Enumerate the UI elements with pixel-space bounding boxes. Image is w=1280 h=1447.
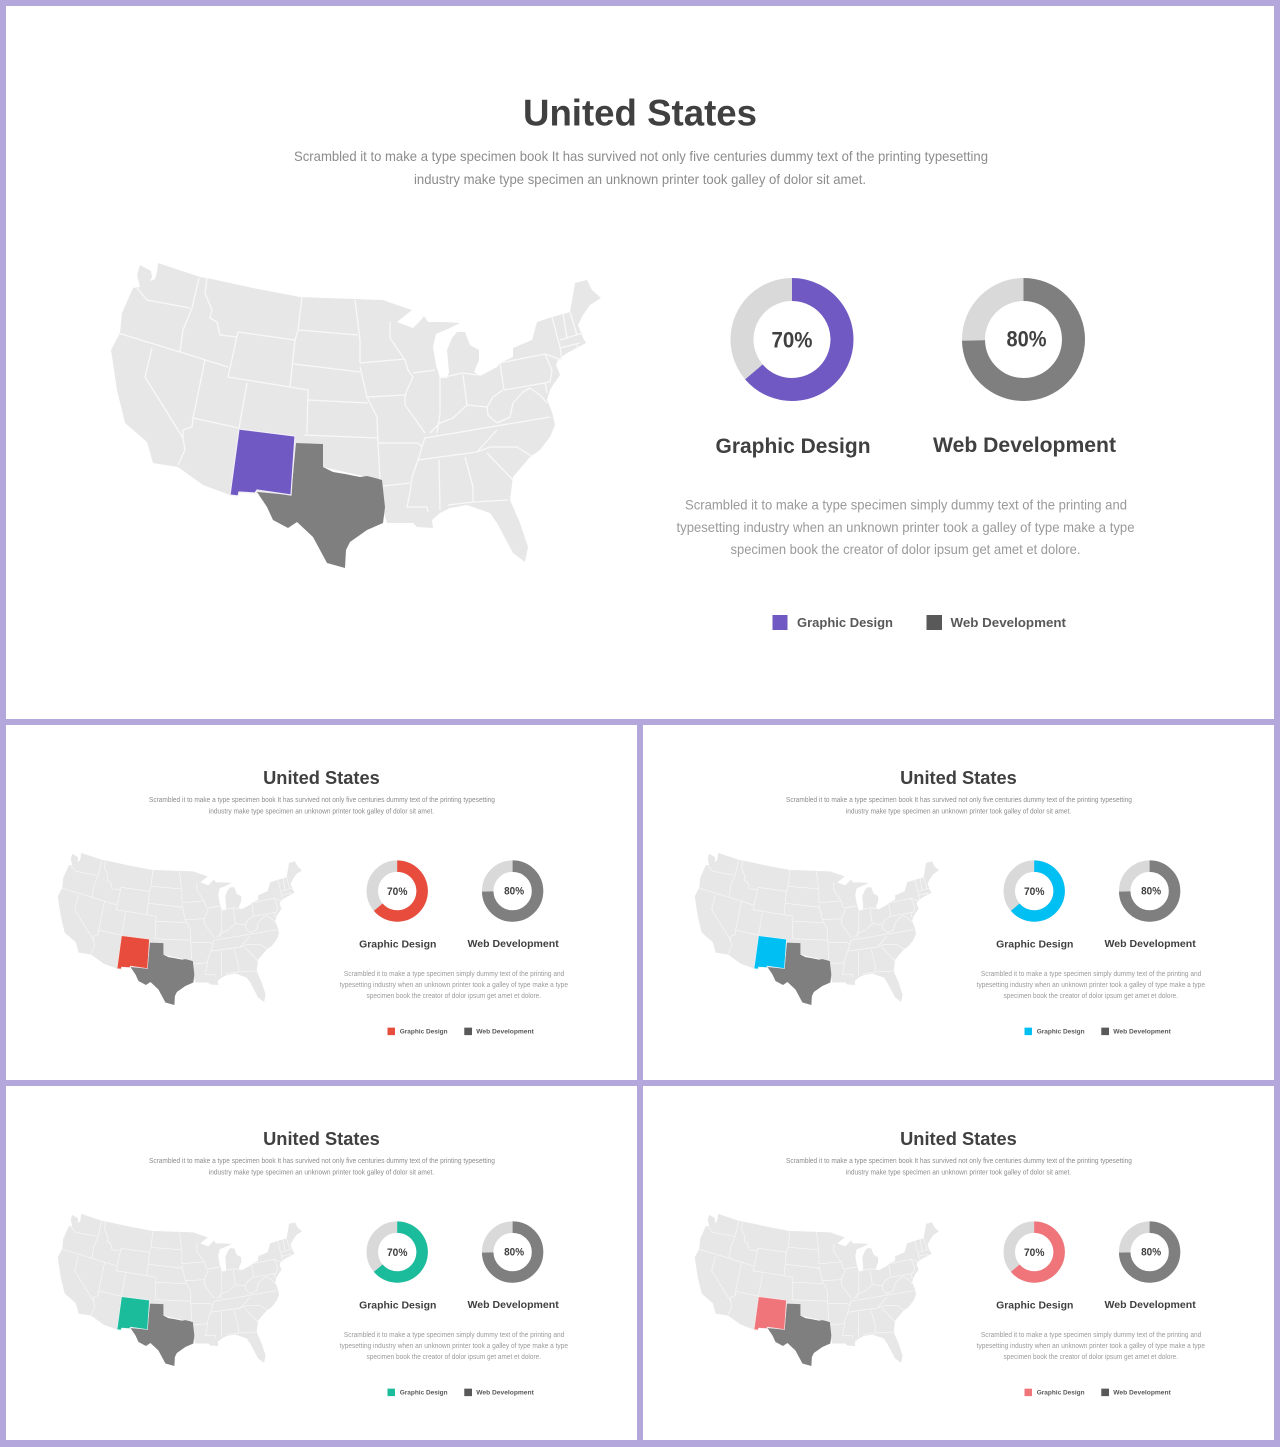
description text: specimen book the creator of dolor ipsum get amet et dolore.: [1004, 993, 1178, 1000]
legend: Web Development: [476, 1390, 535, 1397]
legend: [1025, 1389, 1172, 1397]
title: United States: [263, 767, 380, 788]
title: United States: [523, 92, 757, 134]
donut chart: web development 80%: [488, 1227, 538, 1277]
legend: Graphic Design: [1037, 1390, 1085, 1397]
description text: specimen book the creator of dolor ipsum get amet et dolore.: [730, 541, 1080, 557]
heading: web development: Web Development: [1105, 1300, 1196, 1311]
heading: web development: Web Development: [468, 1300, 559, 1311]
legend: Web Development: [476, 1029, 535, 1036]
donut chart: graphic design 70%: [1009, 1227, 1059, 1277]
subtitle text: industry make type specimen an unknown printer took galley of dolor sit amet.: [846, 1170, 1071, 1177]
legend: Graphic Design: [400, 1029, 448, 1036]
description text: typesetting industry when an unknown printer took a galley of type make a type: [977, 982, 1205, 989]
donut label: 70%: 70%: [1024, 1247, 1045, 1259]
donut label: 80%: 80%: [504, 1247, 524, 1259]
panel: main slide purple: [6, 6, 1274, 719]
heading: graphic design: Graphic Design: [359, 1301, 436, 1312]
heading: graphic design: Graphic Design: [996, 1301, 1073, 1312]
description text: [977, 1332, 1205, 1361]
donut label: 70%: 70%: [772, 328, 812, 352]
donut label: 70%: 70%: [387, 1247, 408, 1259]
donut label: 70%: 70%: [1024, 886, 1045, 898]
description text: typesetting industry when an unknown printer took a galley of type make a type: [340, 982, 568, 989]
legend: [388, 1389, 535, 1397]
description text: [340, 971, 568, 1000]
heading: graphic design: Graphic Design: [359, 940, 436, 951]
description text: [977, 971, 1205, 1000]
subtitle text: Scrambled it to make a type specimen book It has survived not only five centuries dummy text of the printing typesetting: [149, 1158, 495, 1165]
subtitle text: Scrambled it to make a type specimen book It has survived not only five centuries dummy text of the printing typesetting: [786, 1158, 1132, 1165]
legend: [388, 1028, 535, 1036]
subtitle text: [786, 797, 1132, 816]
donut label: 80%: 80%: [504, 886, 524, 898]
subtitle text: Scrambled it to make a type specimen book It has survived not only five centuries dummy text of the printing typesetting: [294, 148, 988, 164]
description text: Scrambled it to make a type specimen simply dummy text of the printing and: [981, 971, 1201, 978]
description text: specimen book the creator of dolor ipsum get amet et dolore.: [367, 993, 541, 1000]
donut chart: web development 80%: [1125, 866, 1175, 916]
subtitle text: industry make type specimen an unknown printer took galley of dolor sit amet.: [846, 809, 1071, 816]
map: United States: [111, 263, 601, 568]
legend: [1025, 1028, 1172, 1036]
description text: [676, 496, 1135, 557]
donut chart: graphic design 70%: [1009, 866, 1059, 916]
heading: graphic design: Graphic Design: [996, 940, 1073, 951]
subtitle text: industry make type specimen an unknown printer took galley of dolor sit amet.: [209, 809, 434, 816]
subtitle text: [149, 1158, 495, 1177]
donut chart: graphic design 70%: [372, 1227, 422, 1277]
donut label: 80%: 80%: [1141, 1247, 1161, 1259]
description text: Scrambled it to make a type specimen simply dummy text of the printing and: [344, 971, 564, 978]
donut label: 80%: 80%: [1006, 326, 1046, 352]
panel: small slide teal: [6, 1086, 637, 1440]
description text: typesetting industry when an unknown printer took a galley of type make a type: [977, 1343, 1205, 1350]
map: United States: [58, 853, 302, 1005]
title: United States: [263, 1128, 380, 1149]
subtitle text: [294, 148, 988, 187]
map: United States: [695, 853, 939, 1005]
heading: web development: Web Development: [1105, 939, 1196, 950]
description text: Scrambled it to make a type specimen simply dummy text of the printing and: [685, 496, 1127, 512]
subtitle text: [786, 1158, 1132, 1177]
donut chart: web development 80%: [1125, 1227, 1175, 1277]
subtitle text: industry make type specimen an unknown printer took galley of dolor sit amet.: [209, 1170, 434, 1177]
subtitle text: [149, 797, 495, 816]
legend: Web Development: [1113, 1390, 1172, 1397]
map: United States: [58, 1214, 302, 1366]
legend: Graphic Design: [1037, 1029, 1085, 1036]
donut chart: web development 80%: [488, 866, 538, 916]
description text: Scrambled it to make a type specimen simply dummy text of the printing and: [344, 1332, 564, 1339]
panel: small slide pink: [643, 1086, 1274, 1440]
donut label: 70%: 70%: [387, 886, 408, 898]
heading: web development: Web Development: [468, 939, 559, 950]
legend: [772, 615, 1067, 630]
subtitle text: industry make type specimen an unknown printer took galley of dolor sit amet.: [414, 171, 866, 187]
description text: typesetting industry when an unknown printer took a galley of type make a type: [340, 1343, 568, 1350]
map: United States: [695, 1214, 939, 1366]
donut chart: graphic design 70%: [372, 866, 422, 916]
panel: small slide cyan: [643, 725, 1274, 1080]
description text: typesetting industry when an unknown printer took a galley of type make a type: [676, 519, 1135, 535]
subtitle text: Scrambled it to make a type specimen book It has survived not only five centuries dummy text of the printing typesetting: [786, 797, 1132, 804]
donut chart: web development 80%: [974, 290, 1074, 390]
legend: Graphic Design: [400, 1390, 448, 1397]
description text: specimen book the creator of dolor ipsum get amet et dolore.: [367, 1354, 541, 1361]
subtitle text: Scrambled it to make a type specimen book It has survived not only five centuries dummy text of the printing typesetting: [149, 797, 495, 804]
heading: web development: Web Development: [933, 434, 1116, 457]
donut chart: graphic design 70%: [742, 290, 842, 390]
donut label: 80%: 80%: [1141, 886, 1161, 898]
panel: small slide red: [6, 725, 637, 1080]
description text: [340, 1332, 568, 1361]
legend: Web Development: [1113, 1029, 1172, 1036]
title: United States: [900, 1128, 1017, 1149]
legend: Graphic Design: [797, 615, 893, 630]
heading: graphic design: Graphic Design: [716, 435, 870, 458]
legend: Web Development: [950, 615, 1067, 630]
description text: specimen book the creator of dolor ipsum get amet et dolore.: [1004, 1354, 1178, 1361]
title: United States: [900, 767, 1017, 788]
description text: Scrambled it to make a type specimen simply dummy text of the printing and: [981, 1332, 1201, 1339]
